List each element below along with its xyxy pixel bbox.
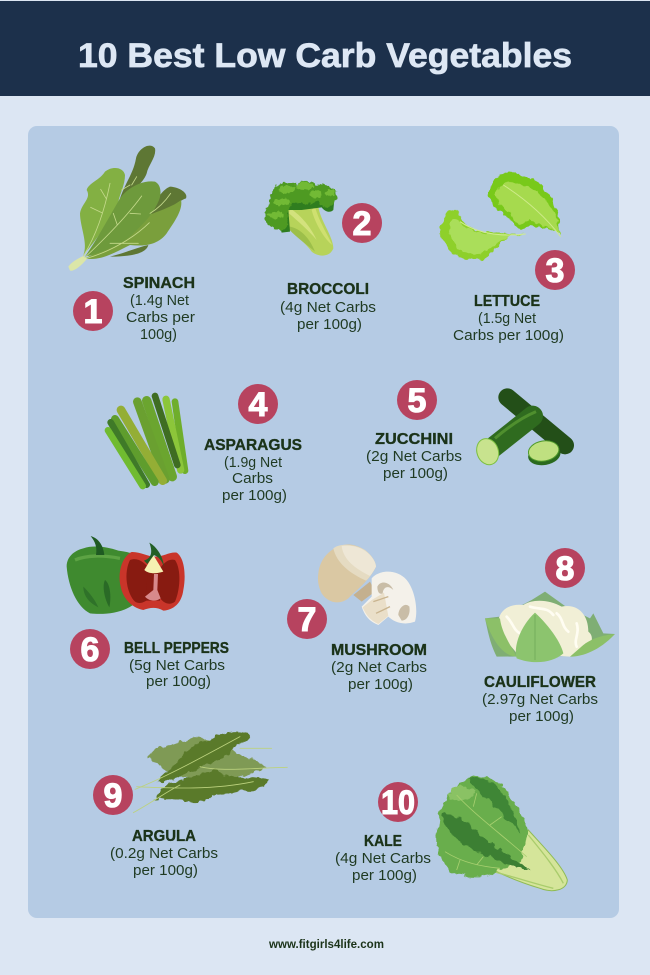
icon: argula [133, 732, 287, 813]
label: zucchini: ZUCCHINI [375, 431, 453, 448]
circle number 4 [238, 384, 278, 424]
label: argula: (0.2g Net Carbs [110, 845, 218, 862]
circle number 5: 5 [408, 382, 426, 420]
label: kale [335, 833, 431, 884]
circle number 5 [397, 380, 437, 420]
label: lettuce: Carbs per 100g) [453, 327, 564, 344]
label: mushroom: MUSHROOM [331, 642, 427, 659]
circle number 2 [342, 203, 382, 243]
item 5: zucchini [366, 380, 565, 482]
item 10: kale [335, 776, 567, 891]
icon: mushroom [318, 544, 416, 625]
circle number 10: 10 [381, 784, 415, 822]
label: spinach: (1.4g Net [130, 292, 190, 309]
icon: bell peppers [67, 536, 185, 614]
item 9: argula [93, 732, 287, 879]
icon: lettuce [440, 172, 561, 260]
label: broccoli: BROCCOLI [287, 281, 369, 298]
label: asparagus: ASPARAGUS [204, 437, 302, 454]
icon: broccoli [264, 181, 337, 256]
label: zucchini [366, 431, 462, 482]
label: cauliflower: CAULIFLOWER [484, 674, 596, 691]
label: broccoli [280, 281, 376, 333]
label: asparagus: (1.9g Net [224, 454, 283, 471]
label: zucchini: (2g Net Carbs [366, 448, 462, 465]
circle number 7 [287, 599, 327, 639]
label: asparagus [204, 437, 302, 504]
icon: asparagus [108, 396, 185, 486]
label: bell peppers [124, 640, 229, 690]
label: cauliflower [482, 674, 598, 725]
circle number 8: 8 [556, 550, 574, 588]
item 6: bell peppers [67, 536, 229, 690]
icon: zucchini [473, 397, 565, 468]
circle number 3 [535, 250, 575, 290]
label: bell peppers: BELL PEPPERS [124, 640, 229, 657]
label: spinach: SPINACH [123, 275, 195, 292]
label: asparagus: Carbs [232, 470, 273, 487]
circle number 9 [93, 775, 133, 815]
circle number 3: 3 [546, 252, 564, 290]
footer url: www.fitgirls4life.com [268, 939, 384, 951]
label: lettuce [453, 293, 564, 344]
item 4: asparagus [108, 384, 302, 504]
circle number 1 [73, 291, 113, 331]
label: kale: KALE [364, 833, 402, 850]
label: argula: per 100g) [133, 862, 198, 879]
label: cauliflower: per 100g) [509, 708, 574, 725]
label: kale: per 100g) [352, 867, 417, 884]
label: spinach: 100g) [140, 326, 177, 343]
header banner [0, 1, 650, 96]
item 1: spinach [68, 146, 195, 343]
label: cauliflower: (2.97g Net Carbs [482, 691, 598, 708]
title: 10 Best Low Carb Vegetables [78, 37, 572, 75]
label: mushroom: per 100g) [348, 676, 413, 693]
circle number 2: 2 [353, 205, 371, 243]
circle number 8 [545, 548, 585, 588]
label: kale: (4g Net Carbs [335, 850, 431, 867]
label: broccoli: per 100g) [297, 316, 362, 333]
item 8: cauliflower [482, 548, 615, 725]
circle number 1: 1 [84, 293, 102, 331]
label: spinach: Carbs per [126, 309, 195, 326]
icon: cauliflower [485, 592, 615, 662]
label: bell peppers: per 100g) [146, 673, 211, 690]
icon: spinach [68, 146, 186, 271]
label: asparagus: per 100g) [222, 487, 287, 504]
label: spinach [123, 275, 195, 343]
circle number 6 [70, 629, 110, 669]
label: bell peppers: (5g Net Carbs [129, 657, 225, 674]
circle number 6: 6 [81, 631, 99, 669]
circle number 7: 7 [298, 601, 316, 639]
circle number 9: 9 [104, 777, 122, 815]
icon: kale [436, 776, 567, 891]
label: argula: ARGULA [132, 828, 196, 845]
item 2: broccoli [264, 181, 382, 333]
main panel [28, 126, 619, 918]
item 3: lettuce [440, 172, 575, 344]
label: broccoli: (4g Net Carbs [280, 299, 376, 316]
label: lettuce: (1.5g Net [478, 310, 537, 327]
label: mushroom [331, 642, 427, 693]
label: zucchini: per 100g) [383, 465, 448, 482]
label: lettuce: LETTUCE [474, 293, 540, 310]
label: mushroom: (2g Net Carbs [331, 659, 427, 676]
item 7: mushroom [287, 544, 427, 693]
label: argula [110, 828, 218, 879]
circle number 4: 4 [249, 386, 268, 424]
